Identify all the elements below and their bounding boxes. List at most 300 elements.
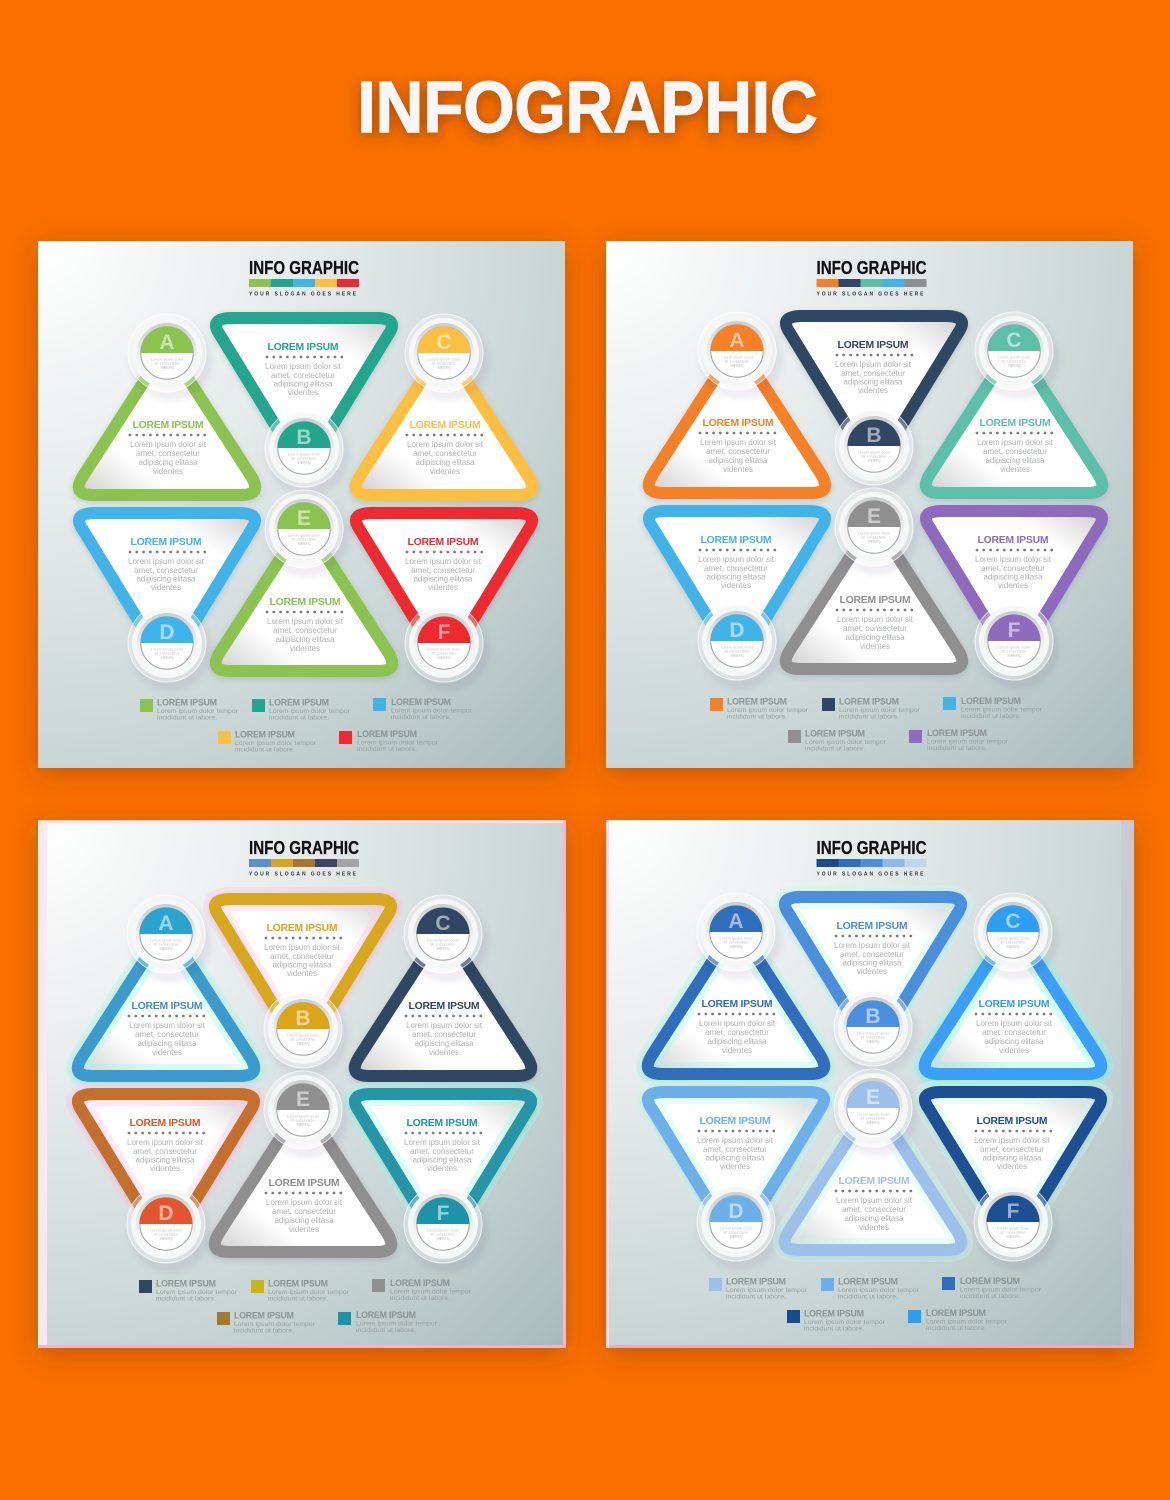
module A triangle: Lorem ipsum dolor sit bbox=[129, 1021, 206, 1030]
legend: incididunt ut labore. bbox=[234, 1328, 294, 1334]
module C triangle: adipiscing elitasa bbox=[414, 1039, 474, 1048]
module B triangle: B bbox=[296, 426, 312, 449]
module C triangle: LOREM IPSUM bbox=[978, 999, 1050, 1010]
module D triangle: D bbox=[729, 619, 745, 642]
legend: LOREM IPSUM bbox=[926, 1308, 986, 1318]
module E triangle: LOREM IPSUM bbox=[838, 1176, 910, 1187]
module D triangle: adipiscing elitasa bbox=[706, 572, 766, 582]
module A triangle: adipiscing bbox=[730, 364, 744, 368]
module C triangle: Lorem ipsum dolor bbox=[998, 356, 1031, 360]
module B triangle: adipiscing elitasa bbox=[272, 960, 332, 970]
panel heading: info graphic: YOUR SLOGAN GOES HERE bbox=[249, 292, 357, 298]
legend: LOREM IPSUM bbox=[727, 696, 787, 706]
module F triangle: Lorem ipsum dolor sit bbox=[974, 1136, 1051, 1145]
panel: top-right orange/navy variant bbox=[606, 241, 1133, 768]
module D triangle: LOREM IPSUM bbox=[700, 1116, 770, 1127]
module C triangle: Lorem ipsum dolor sit bbox=[976, 1019, 1053, 1028]
module A triangle: LOREM IPSUM bbox=[132, 1001, 202, 1012]
module F triangle: sit consectetur bbox=[430, 1232, 456, 1236]
module D triangle: LOREM IPSUM bbox=[700, 535, 772, 546]
module D triangle: Lorem ipsum dolor sit bbox=[698, 555, 775, 564]
module C triangle: C bbox=[436, 331, 452, 354]
module E triangle: Lorem ipsum dolor sit bbox=[836, 1196, 913, 1205]
module D triangle: D bbox=[158, 1202, 174, 1225]
module E triangle: videntes bbox=[859, 1223, 889, 1232]
module B triangle: Lorem ipsum dolor sit bbox=[835, 360, 912, 369]
module A triangle: A bbox=[729, 329, 745, 352]
module B triangle: amet, consectetur bbox=[271, 371, 335, 380]
module B triangle: sit consectetur bbox=[862, 454, 887, 458]
module D triangle: adipiscing bbox=[160, 1236, 173, 1240]
legend: LOREM IPSUM bbox=[268, 1278, 328, 1288]
module B triangle: videntes bbox=[858, 386, 888, 395]
module E triangle: Lorem ipsum dolor sit bbox=[837, 615, 914, 624]
module C triangle bbox=[355, 895, 531, 1076]
module F triangle: adipiscing bbox=[1008, 654, 1021, 658]
panel: bottom-left cyan/amber/navy variant bbox=[36, 820, 566, 1348]
legend: Lorem ipsum dolor tempor bbox=[269, 708, 351, 715]
module A triangle bbox=[78, 895, 254, 1076]
module E triangle: Lorem ipsum dolor bbox=[287, 1114, 320, 1118]
module F triangle: sit consectetur bbox=[1002, 650, 1027, 654]
module F triangle bbox=[355, 1094, 531, 1263]
module C triangle: Lorem ipsum dolor sit bbox=[407, 440, 484, 449]
module F triangle: LOREM IPSUM bbox=[408, 537, 478, 548]
module B triangle: LOREM IPSUM bbox=[836, 921, 908, 932]
legend: incididunt ut labore. bbox=[235, 746, 295, 754]
module F triangle: Lorem ipsum dolor bbox=[428, 648, 461, 652]
legend: LOREM IPSUM bbox=[391, 697, 451, 707]
module C triangle: C bbox=[1006, 329, 1022, 352]
module F triangle: LOREM IPSUM bbox=[978, 535, 1048, 546]
module F triangle: videntes bbox=[428, 583, 458, 592]
legend: incididunt ut labore. bbox=[926, 1325, 986, 1332]
module A triangle: videntes bbox=[152, 1048, 182, 1057]
module C triangle: videntes bbox=[999, 1046, 1029, 1055]
legend: Lorem ipsum dolor tempor bbox=[726, 1287, 808, 1294]
legend: LOREM IPSUM bbox=[234, 1310, 294, 1320]
module C triangle bbox=[925, 893, 1101, 1074]
module C triangle: C bbox=[1005, 910, 1021, 933]
module D triangle: adipiscing elitasa bbox=[136, 1156, 195, 1164]
legend: incididunt ut labore. bbox=[960, 1293, 1020, 1300]
module F triangle: Lorem ipsum dolor bbox=[997, 1226, 1030, 1230]
module C triangle: amet, consectetur bbox=[413, 449, 477, 458]
module D triangle: sit consectetur bbox=[724, 1230, 749, 1234]
module E triangle: adipiscing elitasa bbox=[846, 633, 905, 642]
legend: LOREM IPSUM bbox=[356, 1310, 416, 1320]
module C triangle: videntes bbox=[429, 1048, 459, 1057]
module C triangle: Lorem ipsum dolor bbox=[428, 358, 461, 362]
module E triangle: amet, consectetur bbox=[272, 1207, 336, 1216]
module C triangle: sit consectetur bbox=[432, 362, 457, 366]
panel heading: info graphic: YOUR SLOGAN GOES HERE bbox=[816, 292, 924, 298]
module B triangle: amet, consectetur bbox=[270, 952, 334, 961]
module D triangle: videntes bbox=[151, 583, 181, 592]
module B triangle: sit consectetur bbox=[290, 1038, 316, 1042]
panel heading: info graphic bbox=[816, 258, 926, 298]
module F triangle: amet, consectetur bbox=[410, 1147, 474, 1156]
module D triangle: LOREM IPSUM bbox=[130, 1118, 200, 1129]
module B triangle: LOREM IPSUM bbox=[838, 340, 908, 351]
legend: Lorem ipsum dolor tempor bbox=[838, 1287, 920, 1294]
module E triangle: adipiscing bbox=[298, 542, 311, 546]
module E triangle: adipiscing elitasa bbox=[274, 1216, 334, 1225]
module F triangle: amet, consectetur bbox=[981, 564, 1045, 573]
legend: Lorem ipsum dolor tempor bbox=[268, 1289, 350, 1296]
module A triangle: Lorem ipsum dolor sit bbox=[699, 1019, 776, 1028]
module B triangle: Lorem ipsum dolor sit bbox=[264, 943, 341, 952]
legend: Lorem ipsum dolor tempor bbox=[727, 707, 809, 714]
module B triangle: videntes bbox=[287, 969, 317, 978]
legend: Lorem ipsum dolor tempor bbox=[390, 1288, 472, 1296]
module B triangle bbox=[786, 316, 962, 485]
module F triangle: Lorem ipsum dolor sit bbox=[404, 1138, 481, 1147]
module F triangle: adipiscing elitasa bbox=[982, 1154, 1042, 1162]
module D triangle: amet, consectetur bbox=[134, 566, 198, 575]
module D triangle: D bbox=[728, 1200, 744, 1223]
module D triangle: amet, consectetur bbox=[704, 564, 768, 573]
module D triangle: LOREM IPSUM bbox=[130, 537, 202, 548]
module E triangle: E bbox=[297, 507, 311, 530]
module F triangle: adipiscing elitasa bbox=[414, 574, 473, 584]
module B triangle: videntes bbox=[288, 388, 318, 397]
module F triangle: adipiscing bbox=[438, 656, 451, 660]
module D triangle: videntes bbox=[150, 1164, 180, 1173]
module E triangle: videntes bbox=[290, 644, 320, 653]
legend: incididunt ut labore. bbox=[927, 745, 987, 752]
module A triangle: Lorem ipsum dolor bbox=[721, 356, 754, 360]
module C triangle: amet, consectetur bbox=[412, 1030, 476, 1039]
module C triangle bbox=[356, 314, 532, 495]
module E triangle: Lorem ipsum dolor sit bbox=[266, 1198, 343, 1207]
module C triangle: sit consectetur bbox=[1002, 360, 1027, 364]
module E triangle: adipiscing bbox=[296, 1122, 310, 1126]
triangle modules A to F bbox=[648, 893, 1101, 1261]
legend: incididunt ut labore. bbox=[726, 1294, 786, 1300]
module C triangle: Lorem ipsum dolor sit bbox=[977, 438, 1054, 447]
module F triangle: F bbox=[1007, 1200, 1020, 1223]
module A triangle: amet, consectetur bbox=[706, 447, 770, 456]
module C triangle: Lorem ipsum dolor bbox=[427, 938, 460, 942]
module A triangle: adipiscing elitasa bbox=[138, 1039, 197, 1048]
module A triangle bbox=[648, 893, 824, 1074]
legend: incididunt ut labore. bbox=[390, 1295, 450, 1302]
module E triangle: sit consectetur bbox=[292, 538, 317, 542]
panel heading: info graphic: YOUR SLOGAN GOES HERE bbox=[816, 872, 924, 878]
module F triangle bbox=[925, 1092, 1101, 1261]
module E triangle bbox=[215, 1071, 391, 1252]
legend: incididunt ut labore. bbox=[838, 1294, 898, 1300]
legend bbox=[709, 1276, 1042, 1332]
module C triangle: videntes bbox=[430, 467, 460, 476]
module F triangle: Lorem ipsum dolor sit bbox=[975, 555, 1052, 564]
module B triangle: Lorem ipsum dolor bbox=[287, 1034, 320, 1038]
legend: Lorem ipsum dolor tempor bbox=[804, 1319, 886, 1326]
module C triangle bbox=[926, 312, 1102, 493]
panel heading: info graphic bbox=[249, 258, 359, 298]
module B triangle: adipiscing elitasa bbox=[274, 380, 333, 388]
module E triangle: Lorem ipsum dolor sit bbox=[267, 617, 344, 626]
legend: incididunt ut labore. bbox=[356, 1327, 416, 1334]
module B triangle bbox=[216, 318, 392, 487]
module A triangle: LOREM IPSUM bbox=[702, 418, 774, 429]
legend bbox=[140, 697, 473, 754]
legend: Lorem ipsum dolor tempor bbox=[961, 706, 1043, 714]
module E triangle: LOREM IPSUM bbox=[270, 597, 340, 608]
module A triangle bbox=[649, 312, 825, 493]
module D triangle bbox=[78, 1094, 254, 1263]
module F triangle bbox=[356, 513, 532, 682]
legend: incididunt ut labore. bbox=[357, 746, 417, 753]
legend: LOREM IPSUM bbox=[961, 696, 1021, 706]
module F triangle: Lorem ipsum dolor bbox=[427, 1228, 460, 1232]
module D triangle: Lorem ipsum dolor bbox=[721, 646, 754, 650]
legend: incididunt ut labore. bbox=[961, 713, 1021, 720]
module A triangle: amet, consectetur bbox=[135, 1030, 199, 1039]
module B triangle bbox=[785, 897, 961, 1066]
module C triangle: sit consectetur bbox=[1000, 940, 1026, 944]
module A triangle: videntes bbox=[723, 465, 753, 474]
panel: top-left green/teal/yellow/blue/red variant bbox=[38, 241, 565, 768]
module A triangle: adipiscing bbox=[160, 366, 174, 370]
panel heading: info graphic: INFO GRAPHIC bbox=[816, 258, 926, 278]
module F triangle: videntes bbox=[427, 1164, 457, 1173]
module F triangle: adipiscing elitasa bbox=[984, 572, 1043, 582]
module E triangle: videntes bbox=[860, 642, 890, 651]
module A triangle: adipiscing bbox=[730, 944, 743, 948]
module D triangle: adipiscing elitasa bbox=[136, 574, 196, 584]
legend: LOREM IPSUM bbox=[839, 696, 899, 706]
legend: Lorem ipsum dolor tempor bbox=[927, 738, 1009, 746]
legend: LOREM IPSUM bbox=[927, 728, 987, 738]
legend: Lorem ipsum dolor tempor bbox=[839, 707, 921, 714]
module B triangle: amet, consectetur bbox=[840, 950, 904, 959]
module A triangle: amet, consectetur bbox=[136, 449, 200, 458]
module A triangle: videntes bbox=[722, 1046, 752, 1055]
module F triangle: LOREM IPSUM bbox=[976, 1116, 1048, 1127]
module E triangle: Lorem ipsum dolor bbox=[288, 534, 321, 538]
module C triangle: videntes bbox=[1000, 465, 1030, 474]
module C triangle: Lorem ipsum dolor bbox=[997, 936, 1030, 940]
module B triangle: B bbox=[866, 424, 882, 447]
module A triangle: adipiscing elitasa bbox=[138, 458, 198, 467]
module A triangle: Lorem ipsum dolor bbox=[150, 938, 183, 942]
module E triangle: adipiscing elitasa bbox=[276, 635, 335, 644]
module E triangle bbox=[786, 488, 962, 669]
module A triangle: A bbox=[728, 910, 744, 933]
module E triangle: LOREM IPSUM bbox=[840, 595, 910, 606]
legend: incididunt ut labore. bbox=[839, 714, 899, 720]
module F triangle: F bbox=[438, 621, 451, 644]
module D triangle: sit consectetur bbox=[154, 652, 180, 656]
legend: Lorem ipsum dolor tempor bbox=[805, 739, 887, 746]
module B triangle: Lorem ipsum dolor sit bbox=[265, 362, 342, 371]
module E triangle: E bbox=[866, 1086, 880, 1109]
module F triangle: LOREM IPSUM bbox=[406, 1118, 478, 1129]
module C triangle: LOREM IPSUM bbox=[980, 418, 1050, 429]
module B triangle: sit consectetur bbox=[292, 456, 317, 460]
triangle modules A to F bbox=[78, 895, 531, 1263]
module A triangle bbox=[79, 314, 255, 495]
legend: LOREM IPSUM bbox=[157, 698, 217, 708]
panel heading: info graphic: INFO GRAPHIC bbox=[249, 838, 359, 858]
module E triangle: sit consectetur bbox=[290, 1118, 316, 1122]
module A triangle: Lorem ipsum dolor bbox=[151, 358, 184, 362]
legend: LOREM IPSUM bbox=[390, 1278, 450, 1288]
legend bbox=[710, 696, 1043, 752]
module F triangle: adipiscing elitasa bbox=[412, 1156, 472, 1164]
module A triangle: sit consectetur bbox=[724, 940, 749, 944]
module B triangle: adipiscing elitasa bbox=[844, 378, 903, 386]
module D triangle: videntes bbox=[720, 1162, 750, 1171]
legend: LOREM IPSUM bbox=[269, 698, 329, 708]
legend: incididunt ut labore. bbox=[268, 1296, 328, 1302]
legend: LOREM IPSUM bbox=[357, 729, 417, 739]
legend: Lorem ipsum dolor tempor bbox=[156, 1289, 238, 1296]
legend: Lorem ipsum dolor tempor bbox=[960, 1286, 1042, 1294]
legend: incididunt ut labore. bbox=[157, 714, 217, 722]
module A triangle: adipiscing elitasa bbox=[708, 456, 768, 465]
module F triangle: F bbox=[437, 1202, 450, 1225]
module F triangle bbox=[926, 511, 1102, 680]
module E triangle: Lorem ipsum dolor bbox=[857, 1112, 890, 1116]
module F triangle: Lorem ipsum dolor bbox=[998, 646, 1031, 650]
module D triangle: adipiscing bbox=[730, 1234, 743, 1238]
legend: LOREM IPSUM bbox=[838, 1276, 898, 1286]
module D triangle: adipiscing bbox=[730, 654, 744, 658]
legend: Lorem ipsum dolor tempor bbox=[234, 1321, 316, 1328]
module A triangle: Lorem ipsum dolor sit bbox=[700, 438, 777, 447]
module B triangle: adipiscing bbox=[298, 460, 311, 464]
module C triangle: adipiscing elitasa bbox=[986, 456, 1045, 465]
module C triangle: amet, consectetur bbox=[982, 1028, 1046, 1037]
module B triangle: sit consectetur bbox=[860, 1036, 886, 1040]
legend: incididunt ut labore. bbox=[804, 1326, 864, 1332]
module A triangle: sit consectetur bbox=[154, 362, 180, 366]
module C triangle: amet, consectetur bbox=[983, 447, 1047, 456]
module E triangle: amet, consectetur bbox=[273, 626, 337, 635]
module A triangle: A bbox=[159, 331, 175, 354]
legend: incididunt ut labore. bbox=[156, 1296, 216, 1302]
module D triangle: Lorem ipsum dolor sit bbox=[127, 1138, 204, 1147]
module F triangle: Lorem ipsum dolor sit bbox=[405, 557, 482, 566]
module E triangle: Lorem ipsum dolor bbox=[858, 532, 891, 536]
module E triangle: E bbox=[867, 505, 881, 528]
legend: LOREM IPSUM bbox=[805, 728, 865, 738]
module C triangle: adipiscing bbox=[438, 366, 451, 370]
legend: Lorem ipsum dolor tempor bbox=[357, 740, 439, 746]
module D triangle bbox=[648, 1092, 824, 1261]
module E triangle: amet, consectetur bbox=[843, 624, 907, 633]
module E triangle: videntes bbox=[289, 1225, 319, 1234]
module C triangle: adipiscing bbox=[436, 946, 450, 950]
legend bbox=[139, 1278, 472, 1334]
module D triangle: Lorem ipsum dolor sit bbox=[128, 557, 205, 566]
panel heading: info graphic: YOUR SLOGAN GOES HERE bbox=[249, 872, 357, 878]
module C triangle: adipiscing bbox=[1006, 944, 1020, 948]
module A triangle: Lorem ipsum dolor bbox=[720, 936, 753, 940]
module B triangle: LOREM IPSUM bbox=[268, 342, 338, 353]
legend: LOREM IPSUM bbox=[156, 1278, 216, 1288]
module E triangle: amet, consectetur bbox=[842, 1205, 906, 1214]
module D triangle bbox=[79, 513, 255, 682]
module D triangle: amet, consectetur bbox=[703, 1145, 767, 1154]
module E triangle bbox=[785, 1069, 961, 1250]
module C triangle: adipiscing elitasa bbox=[416, 458, 475, 467]
legend: Lorem ipsum dolor tempor bbox=[926, 1318, 1008, 1326]
module F triangle: amet, consectetur bbox=[980, 1145, 1044, 1154]
module E triangle: sit consectetur bbox=[860, 1116, 886, 1120]
module C triangle: C bbox=[435, 912, 451, 935]
module C triangle: Lorem ipsum dolor sit bbox=[406, 1021, 483, 1030]
module C triangle: adipiscing bbox=[1008, 364, 1021, 368]
legend: LOREM IPSUM bbox=[960, 1276, 1020, 1286]
module A triangle: Lorem ipsum dolor sit bbox=[130, 440, 207, 449]
triangle modules A to F bbox=[649, 312, 1102, 680]
module B triangle bbox=[215, 899, 391, 1068]
module F triangle: adipiscing bbox=[436, 1236, 450, 1240]
module B triangle: B bbox=[295, 1007, 311, 1030]
module A triangle: adipiscing elitasa bbox=[708, 1037, 767, 1046]
title: INFOGRAPHIC bbox=[358, 68, 818, 148]
module B triangle: adipiscing bbox=[296, 1042, 310, 1046]
module D triangle: Lorem ipsum dolor bbox=[151, 648, 184, 652]
module A triangle: amet, consectetur bbox=[705, 1028, 769, 1037]
module B triangle: adipiscing elitasa bbox=[842, 958, 902, 968]
legend: Lorem ipsum dolor tempor bbox=[235, 740, 317, 747]
panel heading: info graphic: INFO GRAPHIC bbox=[816, 838, 926, 858]
module B triangle: Lorem ipsum dolor bbox=[288, 452, 321, 456]
module B triangle: adipiscing bbox=[866, 1040, 880, 1044]
module A triangle: adipiscing bbox=[160, 946, 173, 950]
legend: Lorem ipsum dolor tempor bbox=[391, 708, 473, 714]
module C triangle: sit consectetur bbox=[430, 942, 456, 946]
module D triangle: Lorem ipsum dolor bbox=[150, 1228, 183, 1232]
module B triangle: Lorem ipsum dolor bbox=[857, 1032, 890, 1036]
module F triangle: videntes bbox=[997, 1162, 1027, 1171]
module F triangle: videntes bbox=[998, 581, 1028, 590]
panel heading: info graphic: INFO GRAPHIC bbox=[249, 258, 359, 278]
module A triangle: LOREM IPSUM bbox=[702, 999, 772, 1010]
module F triangle: adipiscing bbox=[1006, 1234, 1020, 1238]
module D triangle: adipiscing elitasa bbox=[706, 1154, 765, 1162]
legend: LOREM IPSUM bbox=[726, 1276, 786, 1286]
module C triangle: LOREM IPSUM bbox=[408, 1001, 480, 1012]
panel: bottom-right blue monochrome variant bbox=[606, 820, 1134, 1348]
module B triangle: amet, consectetur bbox=[841, 369, 905, 378]
module A triangle: videntes bbox=[153, 467, 183, 476]
module D triangle: sit consectetur bbox=[154, 1232, 179, 1236]
module E triangle: LOREM IPSUM bbox=[268, 1178, 340, 1189]
module E triangle: adipiscing bbox=[866, 1120, 880, 1124]
module E triangle: adipiscing bbox=[868, 540, 881, 544]
module C triangle: adipiscing elitasa bbox=[984, 1037, 1044, 1046]
module E triangle: adipiscing elitasa bbox=[844, 1214, 904, 1223]
module D triangle bbox=[649, 511, 825, 680]
module B triangle: adipiscing bbox=[868, 458, 881, 462]
module A triangle: sit consectetur bbox=[154, 942, 179, 946]
module E triangle: E bbox=[296, 1088, 310, 1111]
module D triangle: Lorem ipsum dolor sit bbox=[697, 1136, 774, 1145]
module A triangle: A bbox=[158, 912, 174, 935]
module D triangle: sit consectetur bbox=[724, 650, 750, 654]
module B triangle: B bbox=[865, 1005, 881, 1028]
module A triangle: LOREM IPSUM bbox=[132, 420, 204, 431]
module C triangle: LOREM IPSUM bbox=[410, 420, 480, 431]
legend: Lorem ipsum dolor tempor bbox=[157, 708, 239, 715]
module F triangle: sit consectetur bbox=[432, 652, 457, 656]
